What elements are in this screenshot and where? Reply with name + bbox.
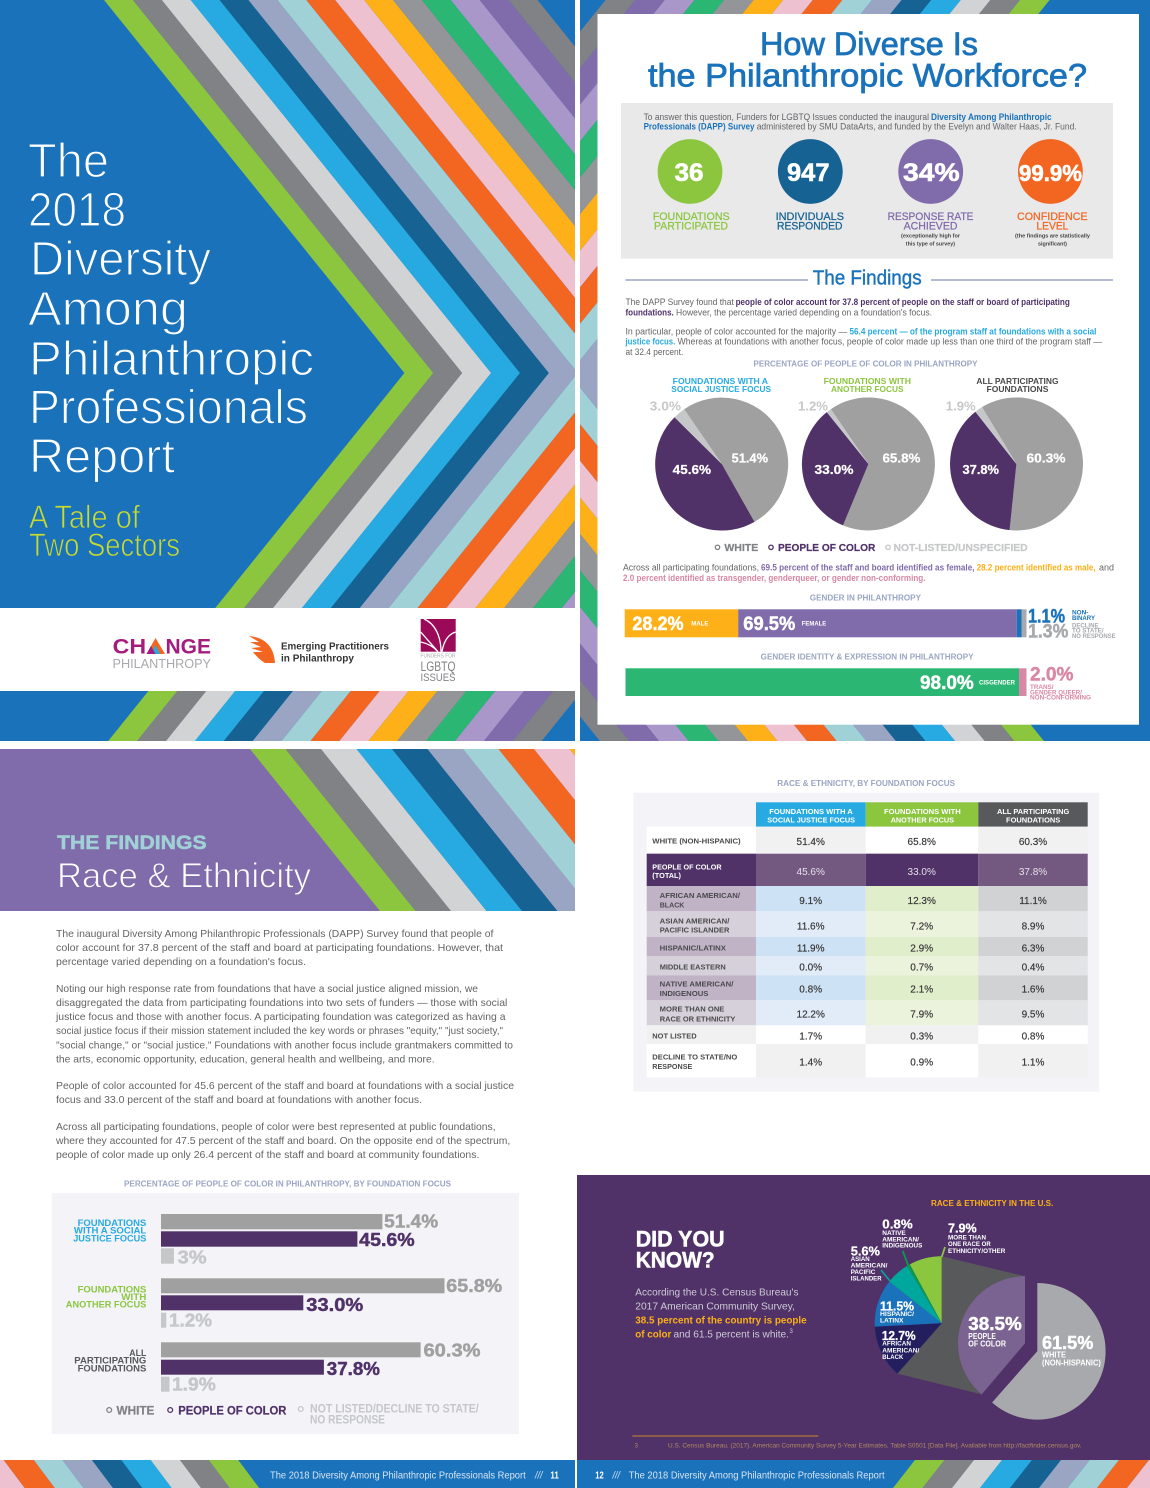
gender text: Across all participating foundations,	[623, 563, 759, 573]
pie legend	[715, 542, 1028, 554]
did you know text: 3	[790, 1329, 794, 1335]
row: native american: 0.8%	[799, 985, 822, 996]
row: asian american	[647, 911, 1088, 937]
stat: 34% response rate	[888, 139, 974, 247]
findings text: In particular, people of color accounted for the majority —	[626, 326, 847, 336]
row: asian american: ASIAN AMERICAN/	[660, 916, 730, 925]
logo: Emerging Practitioners in Philanthropy	[249, 636, 389, 665]
label: people of color: PEOPLE	[968, 1332, 996, 1341]
label: more than one race: MORE THAN	[948, 1235, 986, 1242]
bars: another focus: 1.2%	[169, 1311, 212, 1331]
bar chart legend: PEOPLE OF COLOR	[178, 1405, 287, 1417]
row: people of color: PEOPLE OF COLOR	[652, 862, 722, 871]
pie chart: all participating: FOUNDATIONS	[986, 384, 1049, 394]
label: people of color: 38.5%	[968, 1314, 1022, 1334]
row: african american: 12.3%	[908, 896, 936, 907]
body text	[55, 928, 514, 1161]
row: decline to state: 1.1%	[1022, 1058, 1045, 1069]
did you know text: 38.5 percent of the country is people	[635, 1314, 807, 1326]
did you know heading: DID YOU	[636, 1227, 725, 1252]
label: white: WHITE	[1042, 1351, 1067, 1360]
row: more than one race: RACE OR ETHNICITY	[660, 1014, 735, 1023]
stat: 99.9% confidence: significant)	[1038, 241, 1067, 247]
table header: FOUNDATIONS	[1006, 815, 1060, 824]
stat: 36 foundations: PARTICIPATED	[654, 220, 728, 232]
heading: the findings: The Findings	[813, 267, 922, 289]
footer page 12: ///	[612, 1470, 621, 1481]
row: hispanic: 11.9%	[797, 944, 825, 955]
bars: another focus: WITH	[121, 1292, 146, 1303]
pie chart: another focus	[798, 376, 935, 530]
stat: 34% response rate: ACHIEVED	[904, 220, 958, 232]
gender identity bar chart: TRANS/	[1030, 685, 1054, 691]
heading: the Philanthropic Workforce?	[648, 58, 1087, 94]
bars: social justice focus: 51.4%	[384, 1211, 438, 1231]
bars: another focus: ANOTHER FOCUS	[66, 1300, 146, 1311]
cover title: Philanthropic	[29, 332, 314, 386]
cover title: Professionals	[29, 380, 308, 434]
U.S. pie chart	[851, 1199, 1106, 1420]
row: white: 60.3%	[1019, 837, 1047, 848]
row: more than one race: MORE THAN ONE	[660, 1005, 724, 1014]
gender bar chart: 28.2%	[632, 614, 684, 635]
row: native american: NATIVE AMERICAN/	[660, 980, 734, 989]
row: more than one race	[647, 1000, 1088, 1025]
cover subtitle: A Tale of	[29, 499, 140, 535]
cover subtitle: Two Sectors	[29, 527, 180, 563]
stat: 99.9% confidence: 99.9%	[1019, 160, 1082, 186]
intro text: Professionals (DAPP) Survey	[644, 121, 754, 131]
row: white	[647, 827, 1088, 853]
row: decline to state	[647, 1044, 1088, 1077]
row: hispanic: 2.9%	[910, 944, 933, 955]
findings text: at 32.4 percent.	[626, 347, 683, 357]
pie chart: social justice focus: SOCIAL JUSTICE FOCUS	[671, 384, 771, 394]
cover title: Among	[28, 282, 188, 336]
label: native american: NATIVE	[882, 1230, 906, 1237]
table background	[633, 793, 1099, 1092]
gender bar chart: MALE	[691, 622, 708, 628]
body text: the arts, economic opportunity, education, general health and wellbeing, and more.	[56, 1053, 435, 1065]
body text: color account for 37.8 percent of the staff and board at participating foundations. However, that	[56, 942, 503, 954]
row: middle eastern: 0.0%	[799, 963, 822, 974]
bars: all participating: 1.9%	[172, 1375, 216, 1395]
label: more than one race: 7.9%	[948, 1221, 977, 1236]
logo: Emerging Practitioners in Philanthropy: in Philanthropy	[281, 653, 354, 665]
logo: Change Philanthropy: PHILANTHROPY	[112, 656, 211, 671]
pie legend: NOT-LISTED/UNSPECIFIED	[894, 542, 1028, 554]
gender bar chart: 1.1%	[1028, 607, 1065, 628]
gender identity bar chart: 98.0%	[920, 673, 974, 694]
label: african american: BLACK	[882, 1354, 904, 1361]
white logo band	[0, 608, 575, 691]
row: african american: 9.1%	[799, 896, 822, 907]
label: more than one race: ONE RACE OR	[948, 1241, 991, 1248]
label: white	[1042, 1333, 1101, 1367]
row: african american: 11.1%	[1019, 896, 1047, 907]
stat: 947 individuals: RESPONDED	[777, 220, 843, 232]
body text: focus and 33.0 percent of the staff and board at foundations with another focus.	[56, 1094, 422, 1106]
gender identity bar chart: CISGENDER	[979, 681, 1016, 687]
gender bar chart: NO RESPONSE	[1072, 634, 1116, 640]
label: hispanic: 11.5%	[880, 1298, 914, 1313]
gender text: 28.2 percent identified as male,	[977, 563, 1096, 573]
gender bar chart: BINARY	[1072, 616, 1095, 622]
stat: 34% response rate: (exceptionally high for	[901, 234, 961, 240]
intro text	[644, 112, 1077, 131]
row: asian american: 7.2%	[910, 921, 933, 932]
did you know text: According the U.S. Census Bureau's	[635, 1286, 798, 1298]
label: asian american: ASIAN	[851, 1256, 870, 1263]
row: people of color	[647, 854, 1088, 886]
pie chart: another focus: FOUNDATIONS WITH	[824, 376, 911, 386]
label: native american: INDIGENOUS	[882, 1242, 923, 1249]
label: asian american: 5.6%	[851, 1243, 880, 1258]
logo: Change Philanthropy: NGE	[166, 636, 211, 659]
bars: another focus: 33.0%	[306, 1295, 363, 1315]
bars: social justice focus: 3%	[178, 1247, 207, 1267]
purple background	[577, 1175, 1150, 1460]
panel: how diverse is the philanthropic workforce	[580, 0, 1150, 741]
gender identity bar chart: 2.0%	[1030, 665, 1074, 686]
cover subtitle	[29, 499, 180, 563]
row: not listed: 0.3%	[910, 1031, 933, 1042]
stat: 947 individuals	[776, 139, 844, 232]
row: decline to state: 1.4%	[799, 1058, 822, 1069]
gender text: 2.0 percent identified as transgender, genderqueer, or gender non-conforming.	[623, 573, 926, 583]
panel: cover page	[0, 0, 575, 741]
row: hispanic	[647, 937, 1088, 956]
row: middle eastern: 0.7%	[910, 963, 933, 974]
body text: social justice focus if their mission statement included the key words or phrases "equity," "just society,"	[56, 1025, 503, 1037]
panel: did you know	[577, 1175, 1150, 1488]
stat: 99.9% confidence: (the findings are statistically	[1015, 234, 1091, 240]
row: decline to state: 0.9%	[910, 1058, 933, 1069]
gender identity bar chart: GENDER QUEER/	[1030, 690, 1082, 696]
gender text	[623, 563, 1114, 583]
logo: Funders for LGBTQ Issues: LGBTQ	[420, 659, 456, 674]
row: more than one race: 9.5%	[1022, 1010, 1045, 1021]
label: people of color: OF COLOR	[968, 1340, 1006, 1349]
label: african american: 12.7%	[882, 1328, 916, 1343]
row: asian american: 11.6%	[797, 921, 825, 932]
stat: 34% response rate: this type of survey)	[906, 241, 955, 247]
did you know text: and 61.5 percent is white.	[674, 1328, 789, 1340]
bars: all participating	[74, 1340, 481, 1395]
pie chart: another focus: 1.2%	[798, 399, 828, 414]
pie chart: all participating	[946, 376, 1083, 530]
body text: Across all participating foundations, people of color were best represented at public foundations,	[56, 1121, 496, 1133]
findings text: However, the percentage varied depending on a foundation's focus.	[676, 307, 932, 317]
body text: disaggregated the data from participating foundations into two sets of funders — those with social	[56, 997, 507, 1009]
panel: the findings race and ethnicity page	[0, 749, 575, 1488]
footnote: U.S. Census Bureau. (2017). American Community Survey 5-Year Estimates, Table S0501 [Data File]. Available from http://factfinder.census.gov.	[668, 1444, 1082, 1450]
pie chart: all participating: 1.9%	[946, 399, 976, 414]
row: african american	[647, 886, 1088, 911]
row: hispanic: 6.3%	[1022, 944, 1045, 955]
body text: Noting our high response rate from foundations that have a social justice aligned mission, we	[56, 983, 478, 995]
label: hispanic: HISPANIC/	[880, 1311, 914, 1318]
gender identity bar chart	[626, 653, 1091, 702]
gender identity bar chart: NON-CONFORMING	[1030, 696, 1091, 702]
gender bar chart: FEMALE	[802, 622, 826, 628]
pie chart: another focus: 33.0%	[814, 462, 854, 477]
body text: percentage varied depending on a foundation's focus.	[56, 956, 306, 968]
did you know heading	[636, 1227, 725, 1272]
row: middle eastern	[647, 956, 1088, 975]
pie legend: PEOPLE OF COLOR	[778, 542, 876, 554]
cover title: Report	[29, 430, 176, 484]
bars: all participating: PARTICIPATING	[74, 1356, 146, 1367]
row: more than one race: 7.9%	[910, 1010, 933, 1021]
bar chart panel	[52, 1193, 519, 1434]
body text: justice focus and those with another focus. A participating foundation was categorized as having a	[55, 1011, 506, 1023]
row: african american: BLACK	[660, 900, 685, 909]
gender bar chart: TO STATE/	[1072, 629, 1104, 635]
row: more than one race: 12.2%	[797, 1010, 825, 1021]
logo: Funders for LGBTQ Issues	[420, 619, 456, 684]
pie legend: WHITE	[724, 542, 758, 554]
table header: ALL PARTICIPATING	[997, 807, 1069, 816]
chart title: PERCENTAGE OF PEOPLE OF COLOR IN PHILANTHROPY	[754, 360, 978, 369]
row: people of color: 33.0%	[908, 867, 936, 878]
section heading: THE FINDINGS	[57, 832, 207, 854]
table header: FOUNDATIONS WITH A	[769, 807, 853, 816]
bars: social justice focus: 45.6%	[359, 1230, 415, 1250]
row: asian american: 8.9%	[1022, 921, 1045, 932]
gender identity bar chart: GENDER IDENTITY & EXPRESSION IN PHILANTHROPY	[761, 653, 974, 662]
bars: another focus: 65.8%	[446, 1276, 502, 1296]
label: african american	[882, 1328, 919, 1361]
table header: FOUNDATIONS WITH	[884, 807, 961, 816]
logo: Emerging Practitioners in Philanthropy: Emerging Practitioners	[281, 640, 389, 652]
logo: Funders for LGBTQ Issues: FUNDERS FOR	[420, 654, 456, 660]
gender bar chart	[625, 594, 1116, 643]
footer page 12: 12	[595, 1470, 604, 1481]
bars: social justice focus: FOUNDATIONS	[78, 1218, 146, 1229]
did you know text: of color	[635, 1328, 671, 1340]
page background stripes	[580, 0, 1150, 741]
stat: 947 individuals: INDIVIDUALS	[776, 211, 844, 223]
intro text: To answer this question, Funders for LGBTQ Issues conducted the inaugural	[644, 112, 929, 122]
bar chart legend: NOT LISTED/DECLINE TO STATE/	[310, 1403, 479, 1415]
row: people of color: 37.8%	[1019, 867, 1047, 878]
bars: social justice focus: JUSTICE FOCUS	[73, 1233, 146, 1244]
bar chart legend	[107, 1403, 479, 1426]
bars: another focus: FOUNDATIONS	[78, 1284, 146, 1295]
label: native american: 0.8%	[882, 1217, 913, 1232]
bars: all participating: ALL	[129, 1348, 146, 1359]
row: middle eastern: 0.4%	[1022, 963, 1045, 974]
chart title: PERCENTAGE OF PEOPLE OF COLOR IN PHILANTHROPY, BY FOUNDATION FOCUS	[124, 1180, 452, 1189]
intro text: Diversity Among Philanthropic	[931, 112, 1052, 122]
footer page 11: 11	[550, 1470, 559, 1481]
stat: 947 individuals: 947	[787, 159, 830, 187]
label: more than one race	[948, 1221, 1006, 1255]
stat: 36 foundations: 36	[674, 159, 704, 187]
pie chart: social justice focus: FOUNDATIONS WITH A	[673, 376, 768, 386]
body text: where they accounted for 47.5 percent of the staff and board. On the opposite end of the spectrum,	[55, 1135, 510, 1147]
findings text: people of color account for 37.8 percent of people on the staff or board of participating	[736, 297, 1070, 307]
bar chart legend: NO RESPONSE	[310, 1414, 385, 1426]
row: native american: 2.1%	[910, 985, 933, 996]
bars: social justice focus	[73, 1211, 438, 1267]
U.S. pie chart: RACE & ETHNICITY IN THE U.S.	[931, 1199, 1053, 1208]
cover title: 2018	[28, 183, 126, 237]
label: more than one race: ETHNICITY/OTHER	[948, 1248, 1006, 1255]
label: asian american	[851, 1243, 888, 1282]
stat: 36 foundations: FOUNDATIONS	[653, 211, 730, 223]
pie chart: social justice focus: 51.4%	[732, 451, 768, 466]
findings text: The DAPP Survey found that	[626, 297, 734, 307]
footnote	[632, 1436, 1082, 1450]
row: decline to state: DECLINE TO STATE/NO	[652, 1053, 737, 1062]
findings text: foundations.	[626, 307, 674, 317]
findings text: justice focus.	[625, 337, 675, 347]
row: not listed: NOT LISTED	[652, 1031, 697, 1040]
pie chart: social justice focus: 3.0%	[650, 399, 681, 414]
cover title: The	[28, 134, 109, 188]
bars: all participating: FOUNDATIONS	[78, 1364, 146, 1375]
row: native american: INDIGENOUS	[660, 989, 708, 998]
gender bar chart: NON-	[1072, 611, 1088, 617]
label: native american: AMERICAN/	[882, 1236, 919, 1243]
pie chart: social justice focus: 45.6%	[673, 462, 711, 477]
footer page 12	[577, 1460, 1150, 1488]
row: white: 51.4%	[797, 837, 825, 848]
label: hispanic: LATINX	[880, 1318, 904, 1325]
section heading	[57, 832, 311, 896]
pie chart: all participating: 37.8%	[962, 462, 999, 477]
label: african american: AFRICAN	[882, 1341, 911, 1348]
pie chart: all participating: ALL PARTICIPATING	[976, 376, 1059, 386]
label: people of color	[968, 1314, 1022, 1349]
gender bar chart: 69.5%	[743, 614, 795, 635]
stat: 99.9% confidence: LEVEL	[1036, 220, 1068, 232]
gender text: and	[1099, 563, 1114, 573]
label: hispanic	[880, 1298, 914, 1325]
pie chart: social justice focus	[650, 376, 788, 531]
gender bar chart: DECLINE	[1072, 623, 1098, 629]
pie chart: another focus: ANOTHER FOCUS	[831, 384, 904, 394]
logo: Change Philanthropy	[112, 636, 211, 671]
label: african american: AMERICAN/	[882, 1347, 919, 1354]
row: native american: 1.6%	[1022, 985, 1045, 996]
stat: 99.9% confidence: CONFIDENCE	[1017, 211, 1088, 223]
footer page 11	[0, 1460, 575, 1488]
stat: 99.9% confidence	[1015, 139, 1091, 247]
intro text: administered by SMU DataArts, and funded by the Evelyn and Walter Haas, Jr. Fund.	[757, 121, 1077, 131]
row: white: WHITE (NON-HISPANIC)	[652, 837, 741, 846]
body text: people of color made up only 26.4 percent of the staff and board at community foundations.	[56, 1149, 479, 1161]
bars: another focus	[66, 1276, 502, 1331]
row: hispanic: HISPANIC/LATINX	[660, 943, 726, 952]
body text: People of color accounted for 45.6 percent of the staff and board at foundations with a social justice	[56, 1080, 514, 1092]
row: middle eastern: MIDDLE EASTERN	[660, 962, 726, 971]
row: people of color: (TOTAL)	[652, 871, 681, 880]
row: white: 65.8%	[908, 837, 936, 848]
logo: Funders for LGBTQ Issues: ISSUES	[420, 672, 456, 684]
logo: Change Philanthropy: CH	[113, 636, 146, 659]
findings text: 56.4 percent — of the program staff at foundations with a social	[850, 326, 1096, 336]
label: asian american: PACIFIC	[851, 1269, 876, 1276]
heading	[648, 26, 1087, 94]
row: people of color: 45.6%	[797, 867, 825, 878]
white content panel	[598, 14, 1139, 725]
footer page 11: The 2018 Diversity Among Philanthropic Professionals Report	[270, 1470, 526, 1481]
footnote: 3	[635, 1444, 639, 1450]
row: asian american: PACIFIC ISLANDER	[660, 926, 730, 935]
row: not listed: 0.8%	[1022, 1031, 1045, 1042]
section heading: Race & Ethnicity	[57, 857, 311, 896]
table title: RACE & ETHNICITY, BY FOUNDATION FOCUS	[777, 779, 956, 788]
row: african american: AFRICAN AMERICAN/	[660, 891, 741, 900]
footer page 11: ///	[534, 1470, 544, 1481]
did you know text	[635, 1286, 807, 1340]
bars: all participating: 37.8%	[327, 1359, 380, 1379]
stat: 34% response rate: RESPONSE RATE	[888, 211, 974, 223]
did you know heading: KNOW?	[636, 1247, 715, 1272]
label: asian american: ISLANDER	[851, 1275, 882, 1282]
heading: How Diverse Is	[760, 26, 978, 62]
pie chart: all participating: 60.3%	[1026, 451, 1066, 466]
row: not listed: 1.7%	[799, 1031, 822, 1042]
label: white: (NON-HISPANIC)	[1042, 1358, 1101, 1367]
cover title	[28, 134, 314, 484]
panel: race and ethnicity table	[633, 779, 1099, 1092]
stat: 36 foundations	[653, 139, 730, 232]
bar chart legend: WHITE	[116, 1405, 155, 1417]
bars: social justice focus: WITH A SOCIAL	[74, 1226, 146, 1237]
cover title: Diversity	[30, 232, 212, 286]
row: decline to state: RESPONSE	[652, 1062, 692, 1071]
findings text	[625, 297, 1102, 357]
table header: SOCIAL JUSTICE FOCUS	[767, 815, 855, 824]
body text: The inaugural Diversity Among Philanthropic Professionals (DAPP) Survey found that people of	[56, 928, 493, 940]
label: asian american: AMERICAN/	[851, 1263, 888, 1270]
body text: "social change," or "social justice." Foundations with another focus include grantmakers committed to	[56, 1039, 513, 1051]
cover background chevron stripes	[0, 0, 575, 741]
bars: all participating: 60.3%	[424, 1340, 480, 1360]
stat: 34% response rate: 34%	[903, 159, 960, 187]
findings text: Whereas at foundations with another focus, people of color made up less than one third of the program staff —	[678, 337, 1102, 347]
survey summary box	[621, 103, 1113, 259]
label: white: 61.5%	[1042, 1333, 1093, 1353]
row: native american	[647, 975, 1088, 1000]
footer page 12: The 2018 Diversity Among Philanthropic Professionals Report	[629, 1470, 885, 1481]
label: native american	[882, 1217, 923, 1249]
table header	[756, 802, 1088, 827]
gender bar chart: GENDER IN PHILANTHROPY	[810, 594, 922, 603]
did you know text: 2017 American Community Survey,	[635, 1300, 795, 1312]
gender bar chart: 1.3%	[1028, 622, 1068, 643]
pie chart: another focus: 65.8%	[882, 451, 921, 466]
gender text: 69.5 percent of the staff and board identified as female,	[761, 563, 974, 573]
table header: ANOTHER FOCUS	[891, 815, 954, 824]
row: not listed	[647, 1025, 1088, 1044]
purple header band	[0, 749, 575, 911]
